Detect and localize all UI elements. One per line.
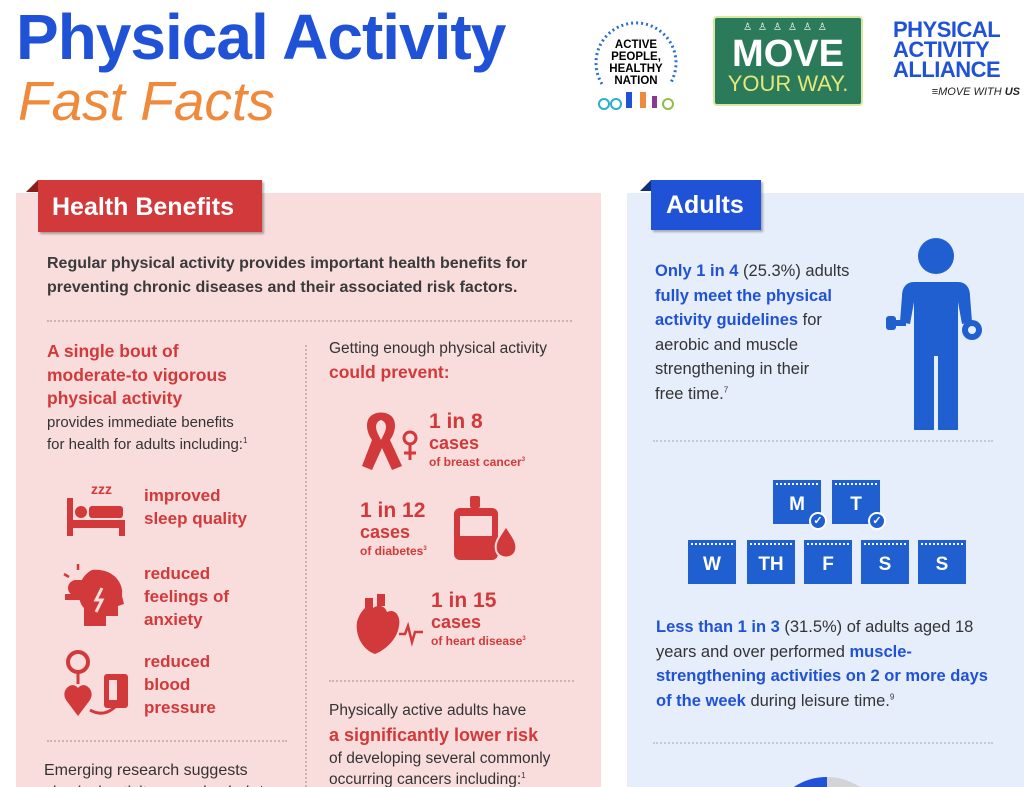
logo: active people healthy nation: HEALTHY <box>609 63 663 75</box>
icon: anxiety head <box>63 564 124 626</box>
text: blood pressure: blood <box>144 675 190 694</box>
logo: move your way: YOUR WAY. <box>728 71 848 96</box>
logo: active people healthy nation <box>594 21 678 110</box>
calendar: muscle strengthening days: W <box>703 554 721 575</box>
calendar: muscle strengthening days: F <box>822 554 834 575</box>
logo: physical activity alliance: ≡MOVE WITH US <box>932 86 1020 98</box>
text: anxiety: reduced <box>144 564 210 583</box>
heading: health benefits tab: Health Benefits <box>52 193 234 221</box>
calendar: muscle strengthening days: ✓ <box>872 515 882 527</box>
text: less than 1 in 3: Less than 1 in 3 (31.5%) of adults aged 18 years and over performed muscle-strengthening activities on 2 or more days of the week during leisure time.9 <box>656 618 988 710</box>
text: single bout <box>47 341 248 452</box>
logo: physical activity alliance: ACTIVITY <box>893 37 989 62</box>
heading: health benefits tab <box>26 180 266 236</box>
logo: active people healthy nation: ACTIVE <box>615 39 657 51</box>
calendar: muscle strengthening days: TH <box>758 554 784 575</box>
text: anxiety: anxiety <box>144 610 203 629</box>
icon: ribbon <box>362 412 418 470</box>
icon: bed sleep <box>67 481 125 536</box>
heading: adults tab <box>640 180 764 234</box>
title: Physical Activity <box>16 1 505 73</box>
stat: breast cancer: 1 in 8 <box>429 410 483 433</box>
text: 1 in 4: Only 1 in 4 (25.3%) adults <box>655 262 849 280</box>
icon: heart <box>356 594 423 654</box>
text: anxiety <box>144 564 230 629</box>
calendar: muscle strengthening days: ✓ <box>813 515 823 527</box>
text: single bout: provides immediate benefits <box>47 414 234 430</box>
stat: heart disease: of heart disease3 <box>431 634 526 648</box>
text: emerging research: Emerging research suggests <box>44 762 248 779</box>
stat: heart disease <box>431 589 526 648</box>
logo: move your way: ♙♙♙♙♙♙ <box>743 22 833 33</box>
calendar: muscle strengthening days <box>688 480 966 584</box>
text: 1 in 4: free time.7 <box>655 384 728 402</box>
stat: diabetes: 1 in 12 <box>360 499 425 522</box>
text: 1 in 4: aerobic and muscle <box>655 336 798 354</box>
text: lower risk: a significantly lower risk <box>329 725 538 745</box>
calendar: muscle strengthening days: S <box>936 554 948 575</box>
text: could prevent: could prevent: <box>329 362 450 382</box>
text: sleep <box>144 486 247 528</box>
text: could prevent: Getting enough physical activity <box>329 340 547 357</box>
text: lower risk: of developing several commonly <box>329 750 550 767</box>
stat: heart disease: cases <box>431 612 481 632</box>
stat: diabetes: of diabetes3 <box>360 544 427 558</box>
logo: active people healthy nation: NATION <box>614 75 658 87</box>
logo: physical activity alliance <box>893 17 1020 98</box>
text: single bout: A single bout of <box>47 341 179 361</box>
stat: breast cancer: of breast cancer3 <box>429 455 525 469</box>
text: lower risk <box>329 702 550 787</box>
text: 1 in 4: strengthening in their <box>655 360 809 378</box>
logo: active people healthy nation: PEOPLE, <box>611 51 661 63</box>
title: Fast Facts <box>18 70 275 132</box>
logo: move your way <box>713 16 863 106</box>
text: single bout: for health for adults including:1 <box>47 436 247 452</box>
panel: adults <box>627 193 1024 787</box>
text: sleep: sleep quality <box>144 509 247 528</box>
text: 1 in 4: activity guidelines for <box>655 311 822 329</box>
text: 1 in 4: fully meet the physical <box>655 286 832 304</box>
icon: person with dumbbells <box>886 238 982 430</box>
title <box>16 1 506 132</box>
text: lower risk: Physically active adults have <box>329 702 526 719</box>
text: single bout: physical activity <box>47 388 182 408</box>
logo: move your way: MOVE <box>732 33 844 75</box>
calendar: muscle strengthening days: T <box>850 494 862 515</box>
calendar: muscle strengthening days: S <box>879 554 891 575</box>
text: anxiety: feelings of <box>144 587 229 606</box>
text: emerging research <box>44 762 265 787</box>
text: could prevent <box>329 340 547 382</box>
icon: glucose meter <box>454 496 516 560</box>
stat: breast cancer: cases <box>429 433 479 453</box>
stat: diabetes: cases <box>360 522 410 542</box>
text: blood pressure: reduced <box>144 652 210 671</box>
calendar: muscle strengthening days: M <box>789 494 805 515</box>
stat: heart disease: 1 in 15 <box>431 589 496 612</box>
text: blood pressure <box>144 652 216 717</box>
heading: adults tab: Adults <box>666 191 744 219</box>
pie chart <box>794 777 860 787</box>
stat: diabetes <box>360 499 427 558</box>
text: blood pressure: pressure <box>144 698 216 717</box>
panel: health benefits <box>16 193 601 787</box>
text: 1 in 4 <box>655 262 849 402</box>
text: sleep: improved <box>144 486 221 505</box>
text: single bout: moderate-to vigorous <box>47 364 227 384</box>
intro text: Regular physical activity provides important health benefits for preventing chronic diseases and their associated risk factors. <box>47 255 527 296</box>
stat: breast cancer <box>429 410 525 469</box>
logo: physical activity alliance: PHYSICAL <box>893 17 1000 42</box>
icon: blood pressure <box>64 650 128 716</box>
logo: physical activity alliance: ALLIANCE <box>893 57 1000 82</box>
icon: bed sleep: zzz <box>91 481 112 497</box>
